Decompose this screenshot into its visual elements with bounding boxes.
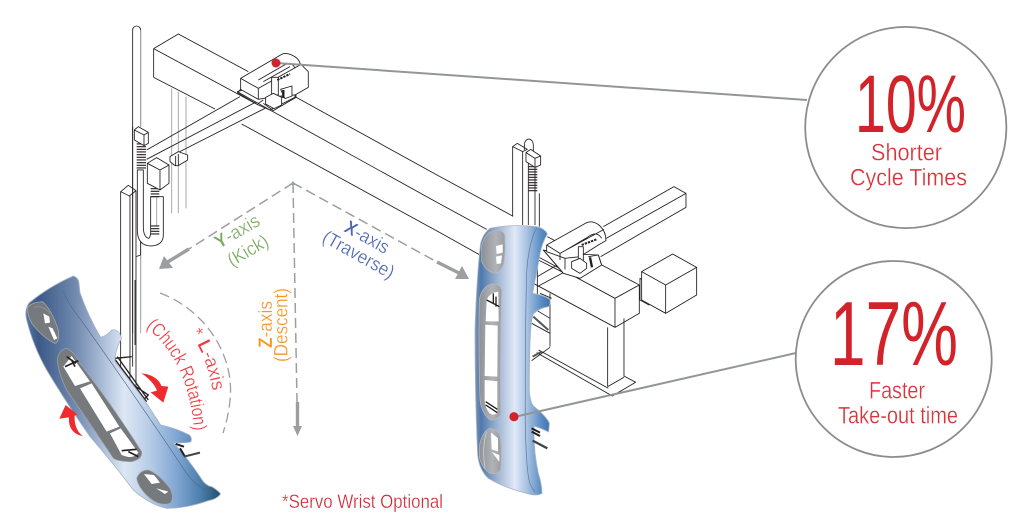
right robot: column and arm [513,139,686,297]
leader line to 10% callout [276,63,807,100]
label: Y-axis (Kick): (Kick) [224,231,273,271]
left robot: kick arm and vertical mast [121,26,265,433]
axis arrow: Z [293,183,302,436]
left bumper [26,276,221,508]
footnote: *Servo Wrist Optional [282,492,443,513]
label: Z-axis (Descent): Z-axis [256,301,277,348]
callout: 10% shorter cycle times: Shorter [871,140,942,167]
callout: 17% faster take-out time [796,261,992,457]
rotation arrow: upper [141,373,168,403]
right bumper: mounting brackets [532,428,547,448]
axis arrow: Y [159,183,293,269]
axis origin tip [290,181,296,185]
marker dot: carriage [272,58,280,68]
left robot: overhead carriage [237,53,308,111]
axis arrow: X [293,183,469,279]
label: X-axis (Traverse): (Traverse) [319,227,398,284]
rotation arrow: lower [59,405,83,436]
right robot: beam end, pedestal and control cabinet [440,177,697,396]
left bumper: mounting bracket [176,444,200,457]
label: X-axis (Traverse): X-axis [341,217,393,259]
right robot: carriage [543,222,606,278]
leader line to 17% callout [514,353,796,417]
label: Y-axis (Kick) [211,211,273,271]
marker dot: bumper [509,412,519,421]
callout: 17% faster take-out time: 17% [830,284,958,385]
L-axis rotation arc [160,293,231,433]
gantry beam and rear supports [154,34,440,233]
right bumper [475,226,550,495]
label: Z-axis (Descent) [256,288,292,362]
label: L-axis (Chuck Rotation): (Chuck Rotation) [146,319,208,430]
callout: 10% shorter cycle times: Cycle Times [850,165,967,192]
callout: 10% shorter cycle times [805,27,1006,228]
callout: 17% faster take-out time: Faster [869,377,925,404]
label: L-axis (Chuck Rotation): * L-axis [196,328,224,390]
label: Y-axis (Kick): Y-axis [211,211,264,253]
callout: 17% faster take-out time: Take-out time [838,402,958,429]
label: Z-axis (Descent): (Descent) [272,288,292,362]
callout: 10% shorter cycle times: 10% [855,59,966,150]
